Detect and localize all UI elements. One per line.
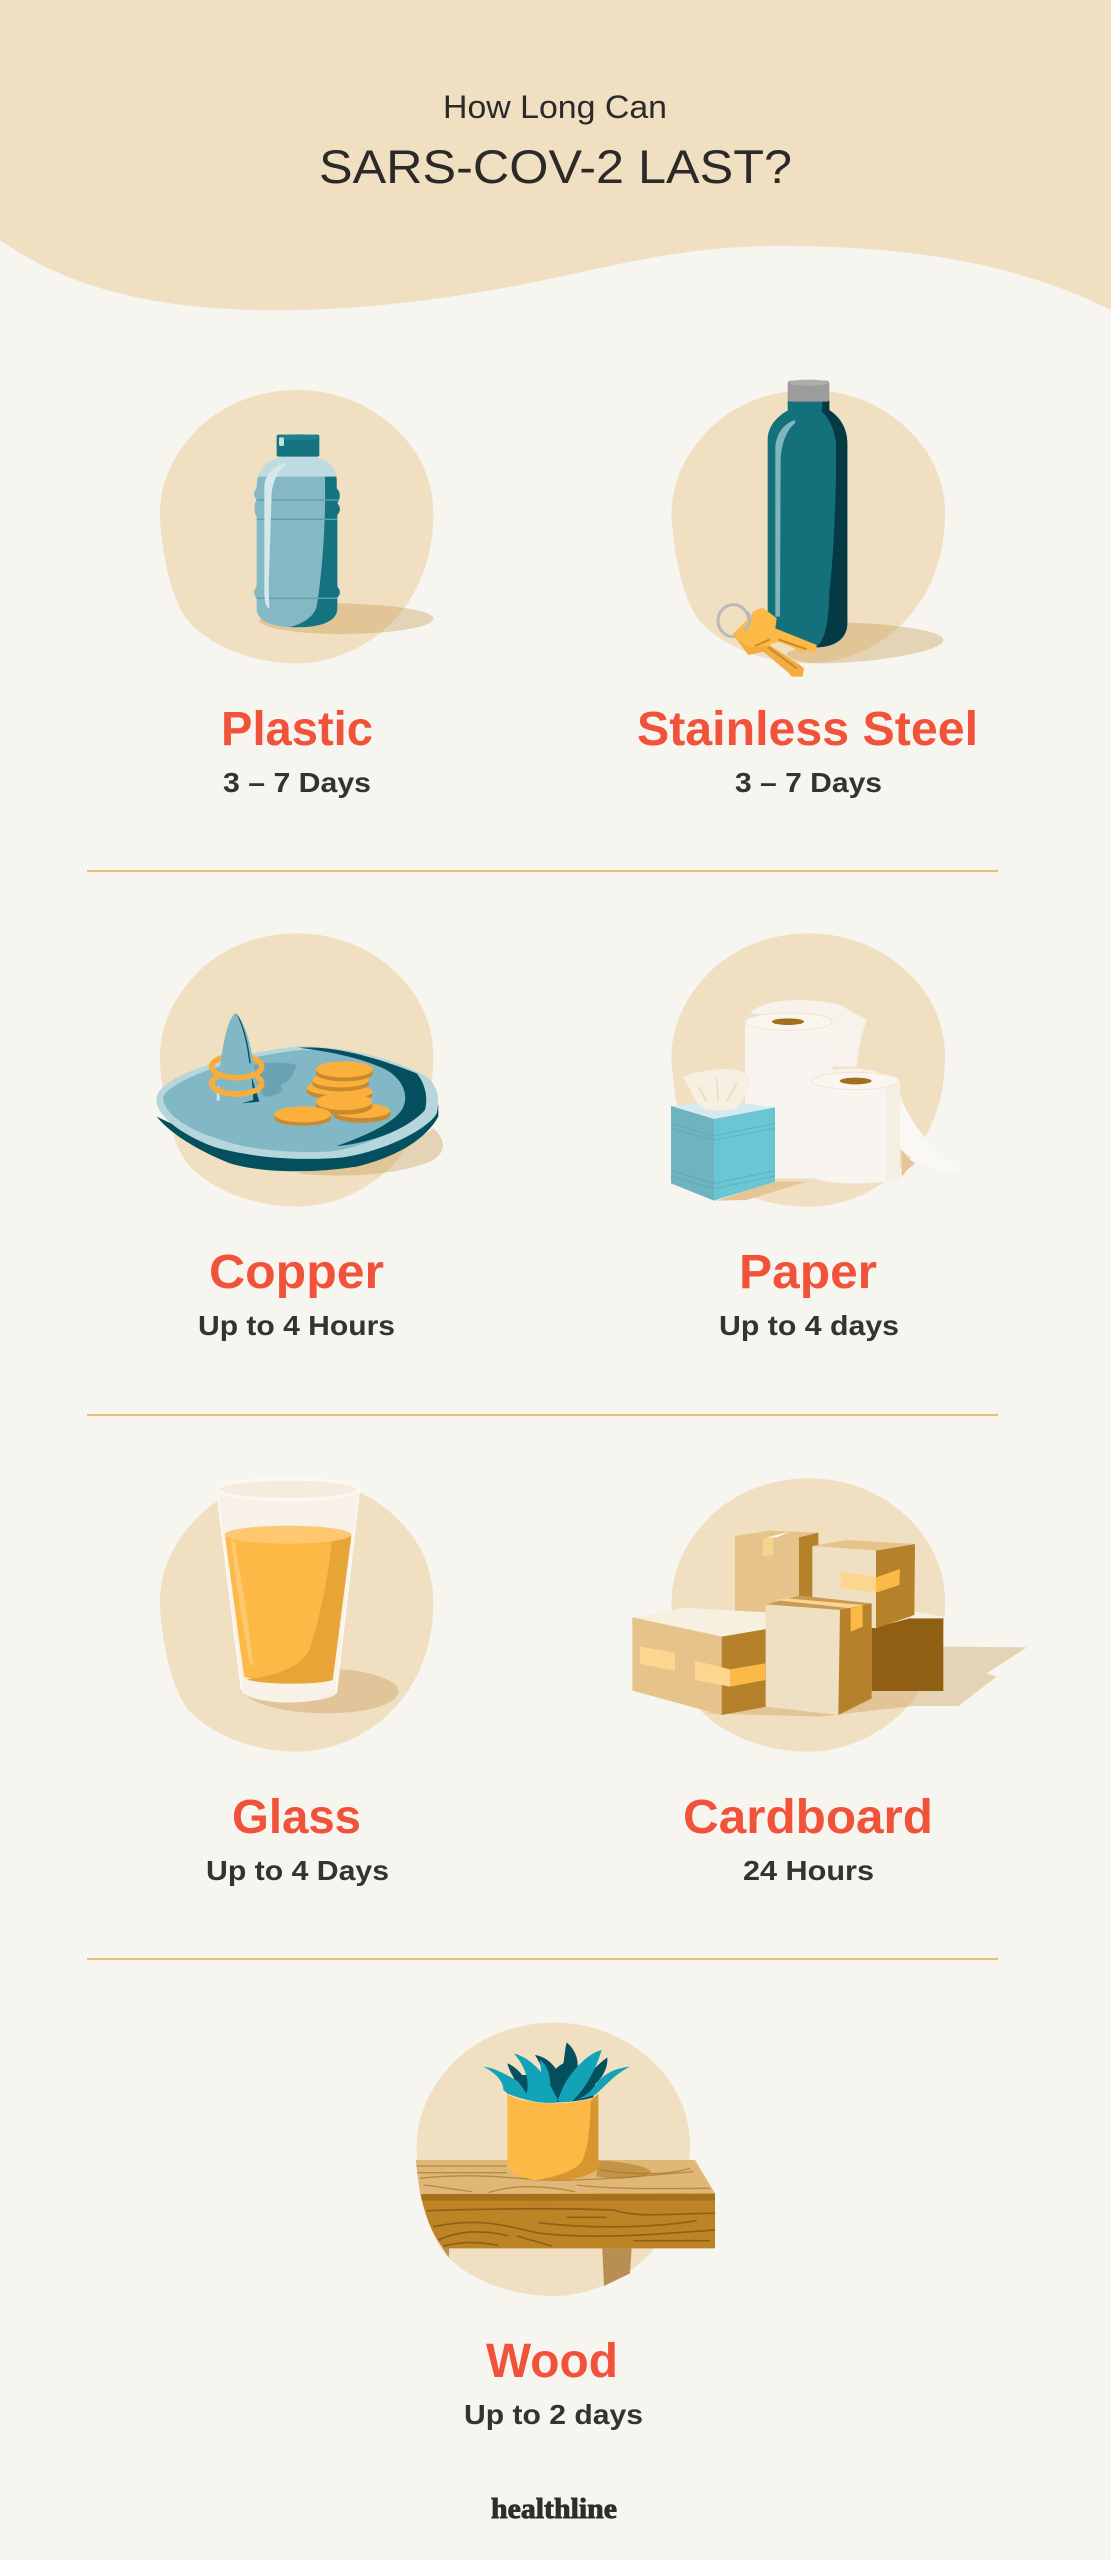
panel: plastic — [160, 390, 433, 798]
divider 3 — [87, 1958, 998, 1960]
duration: glass: Up to 4 Days — [206, 1855, 389, 1886]
panel: copper — [156, 933, 443, 1341]
duration: wood: Up to 2 days — [464, 2399, 643, 2430]
panel: stainless steel — [637, 380, 978, 798]
panel: wood — [416, 2023, 715, 2430]
divider 1 — [87, 870, 998, 872]
panel: cardboard — [632, 1478, 1027, 1886]
heading: stainless steel: Stainless Steel — [637, 703, 978, 756]
divider 2 — [87, 1414, 998, 1416]
icon: glass of juice — [160, 1478, 433, 1752]
heading: wood: Wood — [486, 2335, 618, 2388]
panel: paper — [671, 933, 962, 1341]
duration: copper: Up to 4 Hours — [198, 1310, 395, 1341]
title: SARS-COV-2 LAST? — [319, 140, 792, 193]
heading: plastic: Plastic — [221, 703, 373, 756]
icon: copper dish with rings and coins — [156, 933, 443, 1207]
logo: healthline: healthline — [491, 2493, 617, 2525]
icon: potted plant on wooden table — [416, 2023, 715, 2296]
title: How Long Can — [443, 89, 667, 125]
heading: copper: Copper — [209, 1246, 384, 1299]
title — [319, 89, 792, 193]
heading: glass: Glass — [232, 1791, 361, 1844]
icon: plastic bottle — [160, 390, 433, 663]
duration: stainless steel: 3 – 7 Days — [735, 767, 882, 798]
header wave — [0, 0, 1111, 310]
icon: steel bottle and keys — [672, 380, 945, 677]
duration: cardboard: 24 Hours — [743, 1855, 874, 1886]
panel: glass — [160, 1478, 433, 1886]
icon: paper rolls and tissue box — [671, 933, 962, 1207]
icon: cardboard boxes — [632, 1478, 1027, 1752]
duration: paper: Up to 4 days — [719, 1310, 899, 1341]
heading: cardboard: Cardboard — [683, 1791, 933, 1844]
heading: paper: Paper — [739, 1246, 877, 1299]
duration: plastic: 3 – 7 Days — [223, 767, 371, 798]
